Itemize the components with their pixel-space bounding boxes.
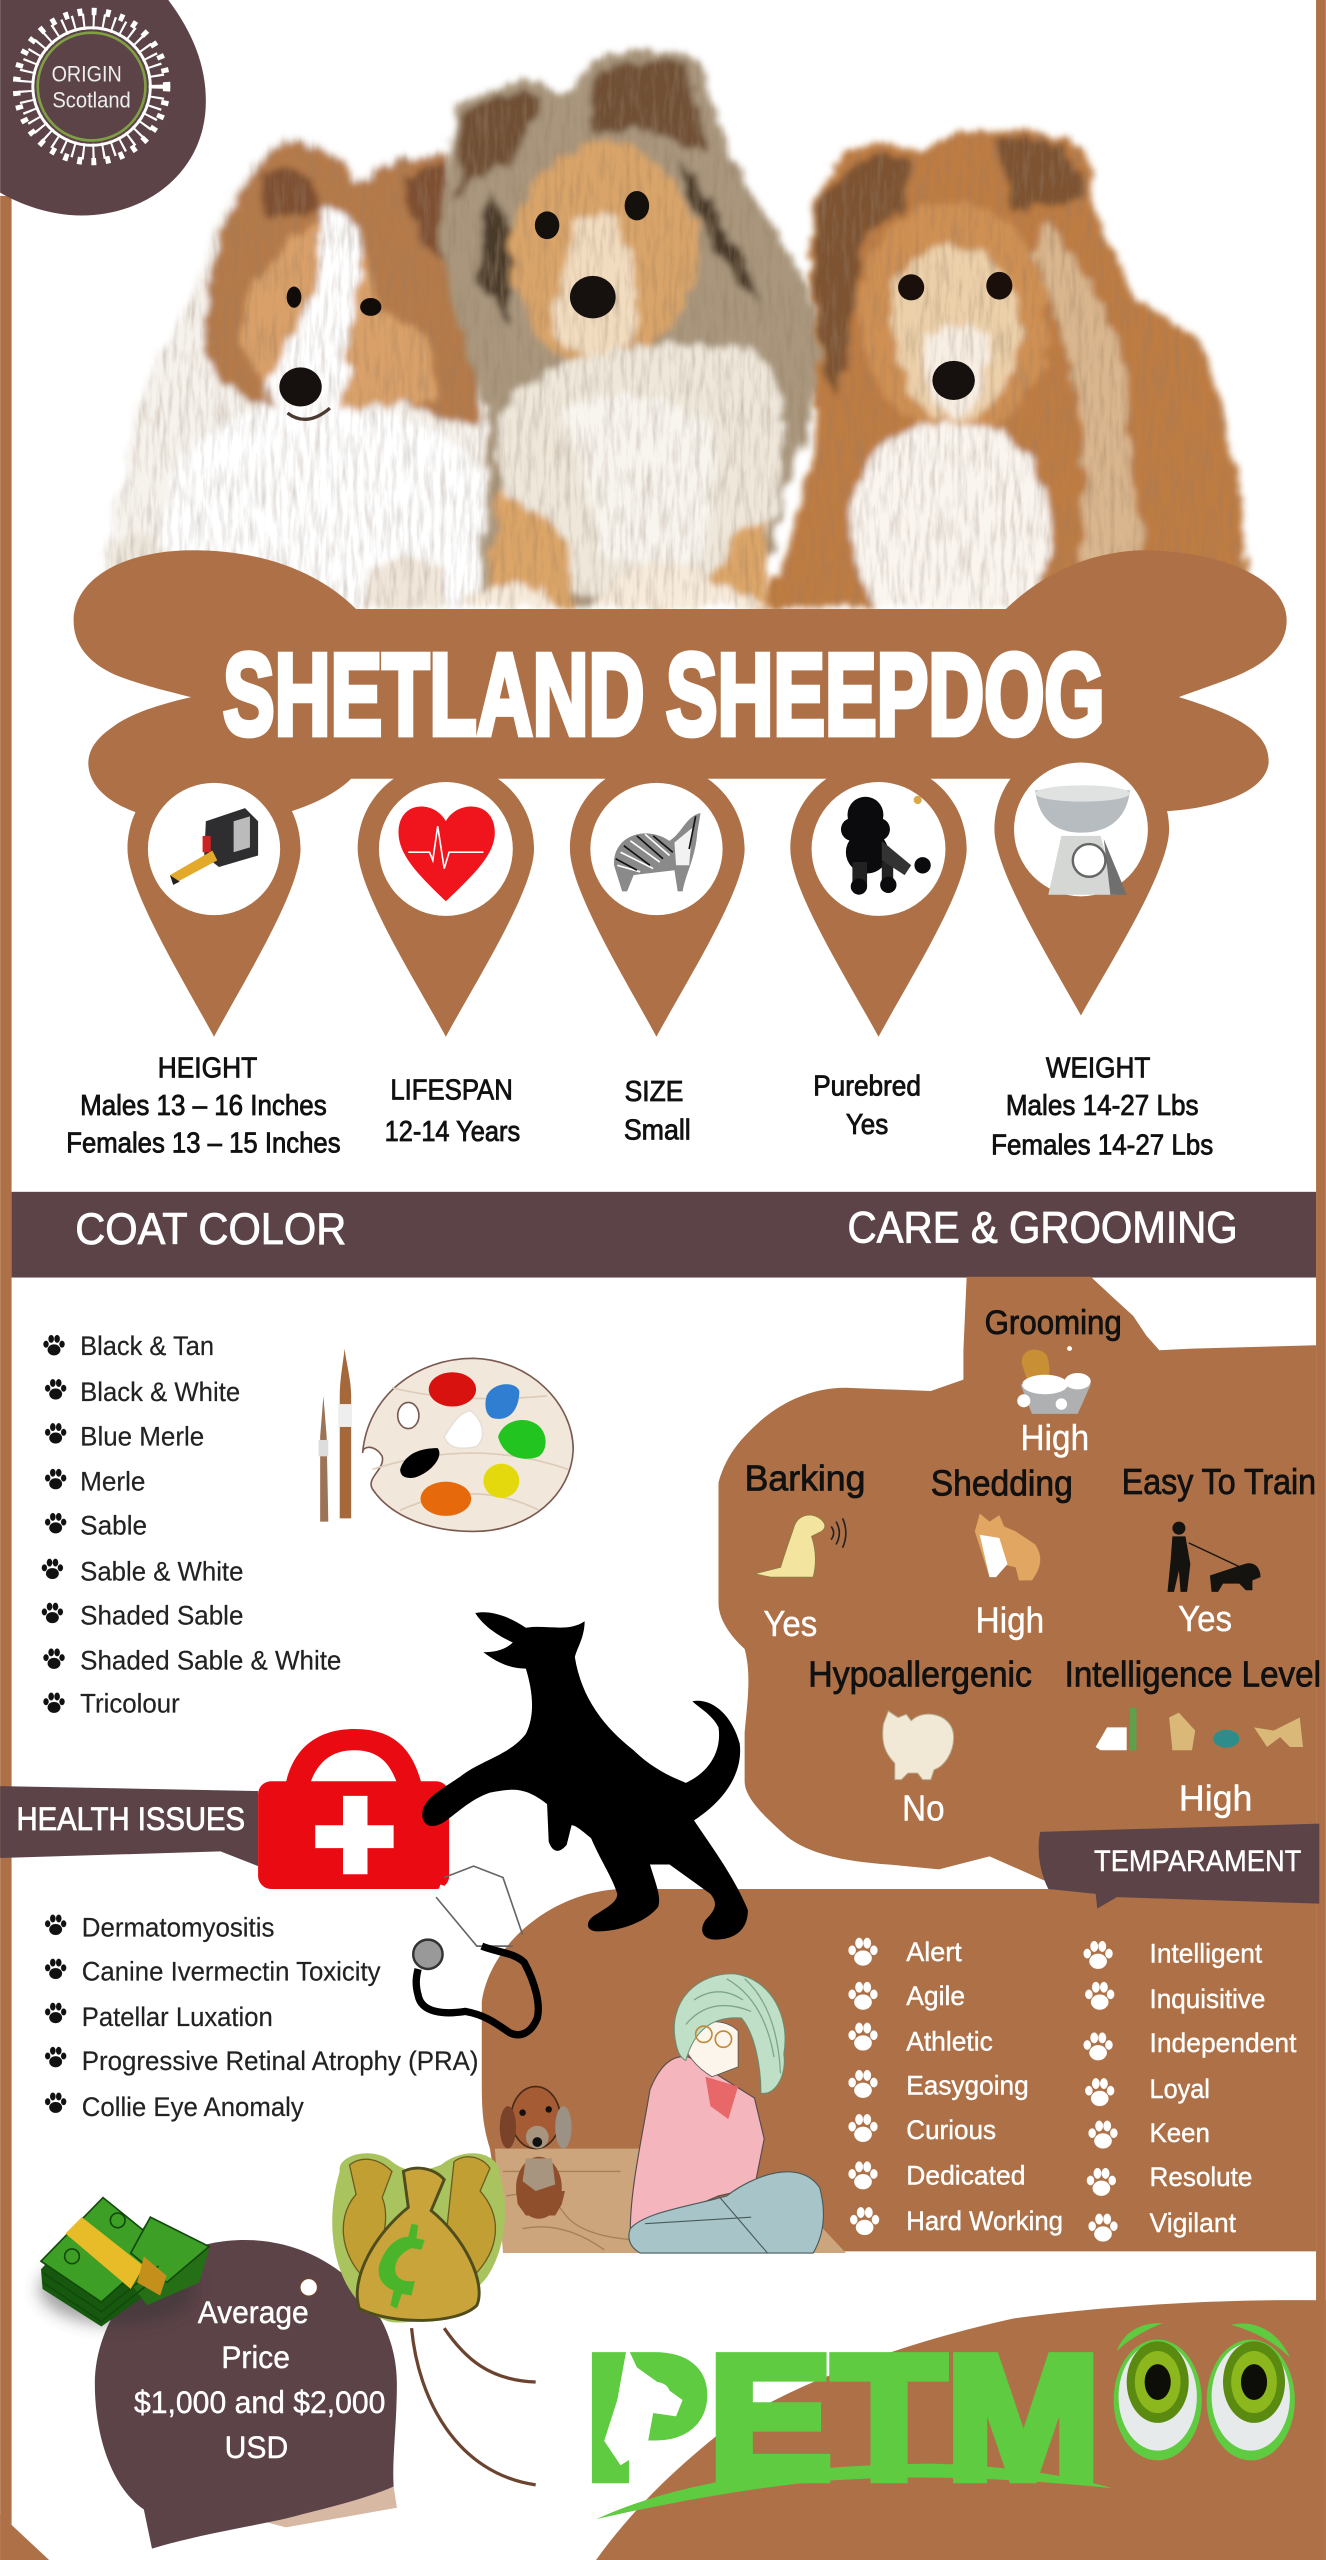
icon: black poodle	[841, 796, 931, 895]
stat: weight: WEIGHT	[1046, 1053, 1150, 1085]
string arcs	[412, 2328, 536, 2485]
health issues list: Progressive Retinal Atrophy (PRA)	[82, 2046, 479, 2076]
icon: money bags	[332, 2153, 505, 2323]
inner green circle	[38, 33, 145, 140]
temperament panel	[482, 1889, 1316, 2253]
pin: height	[127, 762, 301, 1037]
illustration: seated girl	[629, 1974, 824, 2253]
care: intelligence level	[1065, 1654, 1321, 1819]
stat: height: Females 13 – 15 Inches	[66, 1128, 341, 1160]
price text: Price	[221, 2340, 290, 2375]
dog: middle sheltie	[441, 51, 820, 607]
care: hypoallergenic	[808, 1654, 1032, 1828]
temperament traits column 2: Intelligent	[1150, 1938, 1263, 1968]
temperament traits column 1: Dedicated	[906, 2160, 1025, 2190]
coat color list: Sable	[80, 1511, 147, 1541]
icon: dog in tub	[1017, 1346, 1091, 1414]
illustration: wood floor	[495, 2149, 846, 2253]
icon: paint palette and brushes	[319, 1349, 573, 1531]
stat: lifespan	[385, 1075, 520, 1148]
care: shedding	[931, 1463, 1073, 1641]
icon: person walking dog	[1167, 1522, 1261, 1592]
illustration: puppy	[500, 2087, 572, 2219]
temperament traits column 2: Inquisitive	[1150, 1984, 1265, 2014]
icon: sketched collie	[614, 813, 701, 891]
care: barking: Barking	[745, 1458, 865, 1499]
temperament label	[1039, 1824, 1319, 1909]
care: shedding: Shedding	[931, 1463, 1073, 1504]
temperament traits column 2	[1084, 1938, 1297, 2241]
stat: purebred	[813, 1071, 921, 1141]
care: shedding: High	[976, 1600, 1044, 1641]
logo dog head	[604, 2346, 683, 2465]
price tag	[95, 2240, 397, 2549]
icon: white spitz	[883, 1711, 954, 1780]
heading: coat color: COAT COLOR	[75, 1205, 346, 1254]
logo: petmoo	[585, 2319, 1295, 2519]
right eye	[1207, 2323, 1295, 2460]
care: hypoallergenic: No	[902, 1787, 945, 1828]
price text: $1,000 and $2,000	[134, 2385, 385, 2420]
care: hypoallergenic: Hypoallergenic	[808, 1654, 1032, 1695]
coat color list: Blue Merle	[80, 1422, 204, 1452]
temperament traits column 1: Easygoing	[906, 2071, 1029, 2101]
temperament traits column 1: Agile	[906, 1981, 965, 2011]
icon: stethoscope	[413, 1866, 538, 2035]
stat: size	[624, 1076, 691, 1147]
health issues band	[0, 1786, 258, 1866]
coat color list: Black & Tan	[80, 1331, 214, 1361]
care: grooming	[985, 1304, 1122, 1458]
section band	[12, 1192, 1316, 1278]
care: intelligence level: High	[1179, 1778, 1252, 1819]
logo letters: PETM	[585, 2319, 1101, 2516]
coat color list: Merle	[80, 1467, 145, 1497]
temperament traits column 1: Alert	[906, 1937, 962, 1967]
origin badge	[0, 0, 206, 216]
temperament traits column 2: Keen	[1150, 2118, 1210, 2148]
icon: tape measure	[170, 808, 258, 885]
stat: weight: Females 14-27 Lbs	[991, 1129, 1213, 1161]
stat: purebred: Purebred	[813, 1071, 921, 1103]
coat color list: Shaded Sable	[80, 1600, 243, 1630]
icon: corgi	[975, 1513, 1040, 1580]
health issues list: Collie Eye Anomaly	[82, 2092, 304, 2122]
icon: cash stack	[39, 2198, 209, 2327]
pin: purebred	[790, 762, 967, 1037]
health issues list: Canine Ivermectin Toxicity	[82, 1956, 381, 1986]
temperament traits column 1: Athletic	[906, 2027, 993, 2057]
stat: height: HEIGHT	[158, 1053, 257, 1085]
pin: lifespan	[358, 762, 534, 1037]
temperament traits column 2: Vigilant	[1150, 2208, 1237, 2238]
bone banner	[74, 550, 1287, 824]
care: grooming: Grooming	[985, 1304, 1122, 1342]
temperament traits column 1: Hard Working	[906, 2206, 1063, 2236]
temperament traits column 2: Loyal	[1150, 2074, 1210, 2104]
temperament traits column 1: Curious	[906, 2115, 996, 2145]
stat: weight: Males 14-27 Lbs	[1006, 1090, 1199, 1122]
temperament traits column 2: Independent	[1150, 2028, 1297, 2058]
temperament traits column 1	[849, 1937, 1063, 2236]
coat color list: Shaded Sable & White	[80, 1645, 341, 1675]
stat: size: Small	[624, 1115, 691, 1147]
pin: weight	[994, 743, 1169, 1016]
stat: height	[66, 1053, 341, 1160]
coat color list: Black & White	[80, 1377, 240, 1407]
stat: lifespan: LIFESPAN	[390, 1075, 513, 1107]
origin text	[52, 62, 131, 113]
stat: height: Males 13 – 16 Inches	[80, 1090, 327, 1122]
price text: USD	[225, 2430, 288, 2465]
icon: barking dog	[754, 1515, 846, 1577]
care: easy to train	[1122, 1461, 1316, 1639]
coat color list	[42, 1331, 341, 1719]
health issues band: HEALTH ISSUES	[16, 1800, 245, 1837]
coat color list: Tricolour	[80, 1689, 180, 1719]
stat: size: SIZE	[625, 1076, 683, 1108]
footer brown swoosh	[596, 2300, 1326, 2560]
health issues list	[45, 1912, 479, 2122]
black dog silhouette	[422, 1612, 748, 1940]
care: barking	[745, 1458, 865, 1644]
heading: care and grooming: CARE & GROOMING	[847, 1203, 1238, 1252]
health issues list: Dermatomyositis	[82, 1912, 274, 1942]
ring of people	[16, 11, 167, 162]
left eye	[1114, 2323, 1202, 2460]
temperament label: TEMPARAMENT	[1094, 1845, 1301, 1878]
price text	[134, 2295, 385, 2465]
stat: weight	[991, 1053, 1213, 1161]
temperament traits column 2: Resolute	[1150, 2162, 1252, 2192]
stat: lifespan: 12-14 Years	[385, 1116, 520, 1148]
icon: heart	[399, 807, 495, 901]
stat: purebred: Yes	[846, 1109, 888, 1141]
dog: right sheltie	[751, 130, 1247, 607]
care: barking: Yes	[763, 1603, 817, 1644]
care: easy to train: Yes	[1178, 1598, 1232, 1639]
icon: kitchen scale	[1035, 785, 1130, 895]
origin text: ORIGIN	[52, 62, 122, 87]
logo swoosh	[596, 2464, 1112, 2519]
photo: three shetland sheepdogs	[104, 51, 1247, 607]
icon: first aid kit	[258, 1729, 449, 1889]
care and grooming blob	[719, 1277, 1316, 1881]
coat color list: Sable & White	[80, 1556, 243, 1586]
pin: size	[570, 762, 745, 1037]
care: grooming: High	[1021, 1417, 1089, 1458]
origin text: Scotland	[52, 88, 131, 113]
icon: training dogs	[1096, 1708, 1303, 1750]
price text: Average	[198, 2295, 309, 2330]
dog: left sheltie	[104, 136, 506, 607]
health issues list: Patellar Luxation	[82, 2002, 273, 2032]
